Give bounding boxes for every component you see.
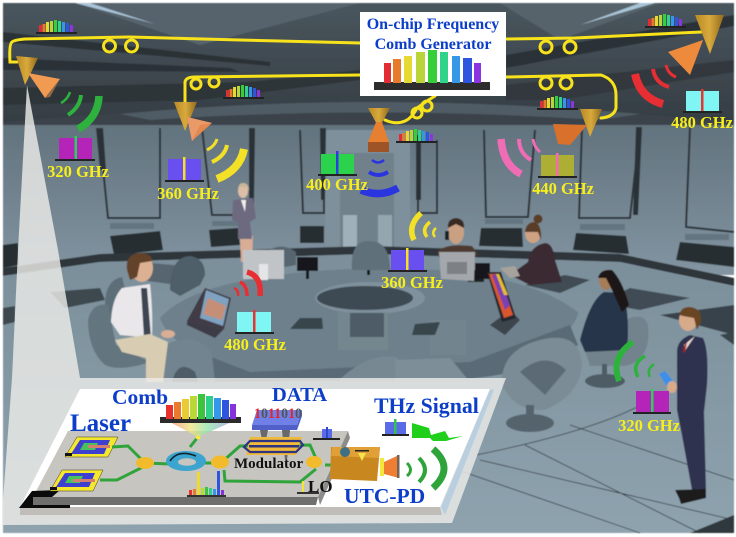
small comb second bbox=[223, 85, 264, 99]
colourful display bbox=[487, 272, 516, 322]
waves: red at tablet bbox=[234, 272, 260, 296]
channel: 480 GHz at table bbox=[224, 310, 286, 354]
central door bbox=[325, 130, 410, 260]
antenna: horn 440 GHz bbox=[553, 109, 602, 145]
waves: pink 440 GHz horn bbox=[501, 139, 540, 174]
channel: 400 GHz: 400 GHz bbox=[306, 175, 368, 194]
heading: Laser: Laser bbox=[70, 410, 131, 437]
channel: 400 GHz bbox=[306, 151, 368, 194]
channel: 320 GHz lower right bbox=[618, 389, 680, 435]
carrier spectrum on chip bbox=[313, 427, 340, 440]
green waveguides bbox=[100, 437, 335, 482]
waves: blue 400 GHz horn bbox=[361, 160, 398, 194]
antenna: horn 360 GHz bbox=[174, 102, 212, 141]
comb bars bbox=[374, 50, 490, 90]
waves: yellow 360 GHz horn bbox=[207, 139, 244, 179]
channel: 480 GHz at table: 480 GHz bbox=[224, 335, 286, 354]
ceiling bbox=[3, 3, 734, 130]
THz signal bolt bbox=[412, 423, 463, 441]
panel: on-chip frequency comb generator bbox=[360, 12, 506, 96]
channel: 320 GHz lower right: 320 GHz bbox=[618, 416, 680, 435]
laser diodes bbox=[50, 437, 118, 491]
comb rainbow fan and spectrum bbox=[160, 394, 241, 437]
channel: 360 GHz upper: 360 GHz bbox=[157, 184, 219, 203]
UTC-PD device bbox=[330, 447, 400, 481]
person: standing woman bbox=[232, 183, 256, 262]
person: standing man in suit with phone bbox=[659, 307, 708, 504]
label: LO: LO bbox=[308, 477, 333, 496]
data driver with probes bbox=[252, 410, 302, 460]
waves from UTC-PD bbox=[407, 449, 444, 488]
small comb centre bbox=[396, 129, 437, 143]
person: seated woman with ponytail bbox=[580, 270, 629, 352]
back wall with panels bbox=[3, 125, 734, 286]
heading: Comb: Comb bbox=[112, 385, 168, 409]
small comb fourth bbox=[537, 96, 578, 110]
channel: 360 GHz at table bbox=[381, 248, 443, 292]
inset white slab bbox=[20, 389, 494, 515]
round table bbox=[160, 254, 578, 382]
projection beam and glass inset backing bbox=[3, 85, 506, 525]
data bits: 1011010 bbox=[254, 406, 302, 422]
small comb top-left bbox=[36, 20, 77, 34]
THz signal spectrum bbox=[382, 419, 409, 436]
floor bbox=[3, 254, 734, 533]
antenna: horn 320 GHz bbox=[16, 56, 60, 98]
channel: 440 GHz: 440 GHz bbox=[532, 179, 594, 198]
heading: THz Signal: THz Signal bbox=[374, 394, 479, 418]
waves: yellow at man on phone bbox=[412, 213, 436, 240]
antenna: horn 480 GHz bbox=[668, 15, 724, 75]
heading: DATA: DATA bbox=[272, 384, 327, 406]
panel: UTC-PD transmitter chip inset bbox=[19, 384, 494, 515]
heading: UTC-PD: UTC-PD bbox=[344, 484, 425, 508]
yellow fibres bbox=[10, 32, 701, 123]
waves: red 480 GHz horn bbox=[635, 65, 676, 104]
LO tone bbox=[297, 481, 319, 494]
chairs bbox=[88, 241, 649, 432]
spectrum at ring output bbox=[187, 471, 226, 497]
channel: 440 GHz bbox=[532, 153, 594, 198]
channel: 480 GHz upper right bbox=[671, 89, 733, 132]
couplers bbox=[136, 434, 322, 469]
waves: green 320 GHz horn bbox=[61, 92, 99, 129]
channel: 320 GHz upper left bbox=[47, 136, 109, 181]
channel: 320 GHz upper left: 320 GHz bbox=[47, 162, 109, 181]
microring resonator bbox=[166, 451, 206, 471]
label: Modulator: Modulator bbox=[234, 456, 304, 472]
person: woman on phone bbox=[500, 214, 562, 285]
heading: on-chip frequency comb generator: On-chip Frequency bbox=[367, 16, 499, 33]
waves: green at standing man bbox=[616, 342, 654, 381]
chip substrate bbox=[19, 431, 350, 508]
devices: silver monitor bbox=[243, 250, 284, 280]
devices: tablet bbox=[187, 288, 231, 338]
heading: on-chip frequency comb generator bbox=[367, 16, 499, 53]
channel: 480 GHz upper right: 480 GHz bbox=[671, 113, 733, 132]
person: man on phone with laptop bbox=[437, 218, 490, 281]
small comb top-right bbox=[645, 14, 686, 28]
antenna: horn 400 GHz bbox=[368, 108, 390, 152]
person: seated man in white shirt bbox=[111, 253, 175, 382]
channel: 360 GHz upper bbox=[157, 157, 219, 203]
channel: 360 GHz at table: 360 GHz bbox=[381, 273, 443, 292]
heading: on-chip frequency comb generator: Comb Generator bbox=[375, 36, 491, 53]
Mach-Zehnder modulator bbox=[244, 437, 303, 455]
